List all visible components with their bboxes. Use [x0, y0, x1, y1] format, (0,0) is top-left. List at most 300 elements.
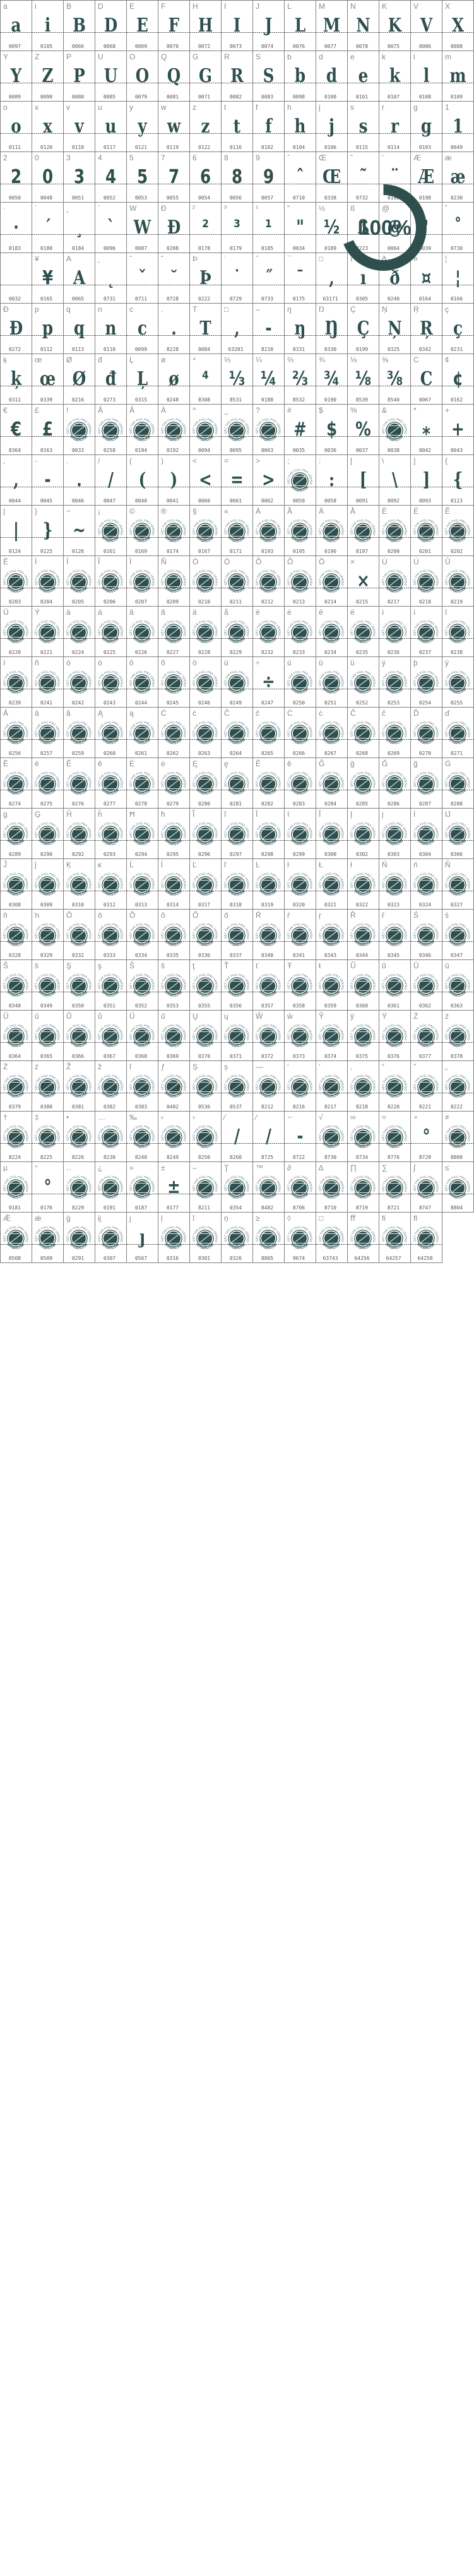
- badge 8734: [347, 1111, 379, 1162]
- badge 0264: Ĉ: [224, 709, 230, 718]
- badge 0362: [410, 959, 442, 1011]
- glyph 0168: [379, 151, 411, 203]
- badge 0293: ĥ: [98, 810, 102, 819]
- glyph 0037: 0037: [356, 448, 368, 453]
- badge 0337: [221, 909, 253, 960]
- glyph 0190: ¾: [324, 368, 340, 390]
- badge 0167: [189, 505, 222, 556]
- glyph 0273: đ: [105, 368, 116, 390]
- glyph 0188: 0188: [261, 397, 273, 403]
- glyph 0103: 0103: [419, 145, 431, 150]
- glyph 0097: 0097: [9, 44, 21, 49]
- glyph 0050: 2: [3, 153, 8, 162]
- badge 0207: Ï: [129, 557, 131, 566]
- badge 0352: 0352: [135, 1003, 147, 1009]
- glyph 0728: ˘: [170, 267, 178, 289]
- glyph 0040: (: [129, 456, 132, 465]
- badge 0312: ĸ: [98, 860, 102, 869]
- glyph 0080: P: [66, 52, 71, 61]
- badge 0372: 0372: [261, 1054, 273, 1059]
- glyph 0036: $: [319, 406, 323, 415]
- badge 0268: [347, 707, 379, 758]
- badge 0207: 0207: [135, 599, 147, 605]
- glyph 0231: 0231: [451, 347, 463, 352]
- glyph 0342: Ŗ: [420, 318, 433, 340]
- badge 0346: 0346: [419, 953, 431, 958]
- badge 0313: Ĺ: [129, 860, 134, 869]
- badge 0380: 0380: [40, 1104, 52, 1110]
- badge 0207: [126, 555, 158, 607]
- glyph 0342: Ŗ: [413, 305, 419, 314]
- glyph 0092: [379, 454, 411, 506]
- badge 0266: [284, 707, 316, 758]
- badge 0274: Ē: [3, 759, 8, 768]
- glyph 0098: b: [295, 65, 305, 87]
- glyph 0042: 0042: [419, 448, 431, 453]
- glyph 0062: [252, 454, 285, 506]
- glyph 0049: 1: [453, 116, 463, 138]
- glyph 0272: 0272: [9, 347, 21, 352]
- badge 0359: ŧ: [319, 961, 321, 970]
- glyph 0331: ŋ: [295, 318, 305, 340]
- glyph 0081: Q: [167, 65, 181, 87]
- glyph 0089: Y: [11, 65, 21, 87]
- glyph 0050: 2: [11, 166, 21, 188]
- badge 0298: [252, 808, 285, 859]
- badge 0059: 0059: [293, 498, 305, 504]
- glyph 0035: 0035: [293, 448, 305, 453]
- glyph 0231: [442, 303, 474, 354]
- glyph 0091: [: [360, 469, 367, 491]
- badge 0266: Ċ: [287, 709, 293, 718]
- badge 64256: ﬀ: [350, 1214, 355, 1223]
- badge 0299: 0299: [293, 852, 305, 857]
- glyph 0083: S: [263, 65, 274, 87]
- badge 0228: [189, 606, 222, 657]
- badge 0221: [32, 606, 64, 657]
- badge 0213: [284, 555, 316, 607]
- badge 8776: ≈: [382, 1113, 386, 1122]
- badge 0262: [158, 707, 190, 758]
- badge 0201: É: [413, 507, 418, 516]
- badge 0508: Ǽ: [3, 1214, 11, 1223]
- glyph 8210: 8210: [261, 347, 273, 352]
- badge 8710: [316, 1161, 348, 1213]
- badge 8216: [284, 1060, 316, 1112]
- badge 0246: [189, 656, 222, 708]
- glyph 0216: [63, 353, 95, 405]
- badge 0361: [379, 959, 411, 1011]
- glyph 0248: 0248: [167, 397, 179, 403]
- glyph 0065: 0065: [72, 296, 84, 302]
- badge 0349: ŝ: [35, 961, 39, 970]
- glyph 0071: 0071: [198, 94, 210, 100]
- badge 0282: [252, 757, 285, 809]
- badge 0260: [95, 707, 127, 758]
- glyph 0215: ×: [350, 557, 355, 566]
- glyph 0051: 3: [74, 166, 85, 188]
- glyph 0222: Þ: [199, 267, 211, 289]
- badge 0367: ů: [98, 1012, 102, 1021]
- glyph 0185: 0185: [261, 246, 273, 251]
- badge 0195: [284, 505, 316, 556]
- badge 8805: [252, 1212, 285, 1263]
- badge 0327: Ň: [445, 860, 451, 869]
- badge 0362: Ū: [413, 961, 419, 970]
- glyph 0032: 0032: [9, 296, 21, 302]
- badge 0210: [189, 555, 222, 607]
- badge 0169: ©: [129, 507, 135, 516]
- glyph 8728: ∘: [413, 1113, 418, 1122]
- badge 0275: [32, 757, 64, 809]
- badge 0319: 0319: [261, 902, 273, 908]
- glyph 0216: Ø: [66, 355, 72, 364]
- glyph 0035: #: [293, 418, 307, 441]
- glyph 0123: {: [445, 456, 447, 465]
- badge 63743: [316, 1212, 348, 1263]
- glyph 0223: ß: [350, 204, 355, 213]
- glyph 0090: 0090: [40, 94, 52, 100]
- glyph 0164: [410, 252, 442, 304]
- glyph 8364: 8364: [9, 448, 21, 453]
- glyph 0043: +: [451, 418, 465, 441]
- badge 0271: 0271: [451, 751, 463, 756]
- badge 0250: ú: [287, 658, 292, 667]
- glyph 0111: o: [11, 116, 21, 138]
- badge 0297: ĩ: [224, 810, 226, 819]
- badge 0284: Ĝ: [319, 759, 324, 768]
- badge 0536: Ș: [193, 1062, 198, 1071]
- badge 8706: ∂: [287, 1163, 291, 1172]
- badge 0204: 0204: [40, 599, 52, 605]
- badge 0376: 0376: [388, 1054, 400, 1059]
- glyph 0305: ı: [350, 254, 352, 263]
- badge 0234: 0234: [324, 650, 336, 655]
- glyph 0096: `: [98, 204, 100, 213]
- badge 0253: ý: [382, 658, 386, 667]
- glyph 0086: V: [413, 2, 418, 11]
- badge 0194: Â: [129, 406, 134, 415]
- glyph 0325: Ņ: [382, 305, 388, 314]
- badge 0197: 0197: [356, 549, 368, 554]
- badge 0224: 0224: [72, 650, 84, 655]
- badge 0214: 0214: [324, 599, 336, 605]
- badge 0340: 0340: [261, 953, 273, 958]
- glyph 0198: 0198: [419, 195, 431, 201]
- glyph 8364: €: [3, 406, 8, 415]
- badge 0306: 0306: [451, 852, 463, 857]
- glyph 0040: 0040: [135, 498, 147, 504]
- badge 8220: [379, 1060, 411, 1112]
- glyph 0114: [379, 101, 411, 152]
- glyph 0199: [347, 303, 379, 354]
- badge 0213: 0213: [293, 599, 305, 605]
- glyph 0072: [189, 0, 222, 51]
- glyph 0177: ±: [167, 1176, 181, 1198]
- badge 0278: 0278: [135, 801, 147, 807]
- badge 0275: 0275: [40, 801, 52, 807]
- glyph 0183: ·: [13, 217, 19, 239]
- badge 0372: Ŵ: [256, 1012, 263, 1021]
- glyph 0077: M: [319, 2, 325, 11]
- glyph 0567: ȷ: [129, 1214, 131, 1223]
- glyph 8539: ⅛: [350, 355, 357, 364]
- glyph 0036: [316, 404, 348, 455]
- badge 8250: 8250: [198, 1154, 210, 1160]
- badge 8229: 8229: [72, 1205, 84, 1211]
- glyph 0090: Z: [42, 65, 53, 87]
- badge 0288: 0288: [451, 801, 463, 807]
- glyph 0731: [95, 252, 127, 304]
- badge 0402: ƒ: [161, 1062, 165, 1071]
- glyph 0083: [252, 50, 285, 102]
- badge 64258: ﬂ: [413, 1214, 417, 1223]
- glyph 0710: 0710: [293, 195, 305, 201]
- badge 0366: 0366: [72, 1054, 84, 1059]
- glyph 0044: [0, 454, 32, 506]
- glyph 0036: $: [326, 418, 337, 441]
- badge 0038: [379, 404, 411, 455]
- glyph 8539: ⅛: [355, 368, 371, 390]
- glyph 0188: ¼: [261, 368, 276, 390]
- badge 0321: [316, 858, 348, 910]
- glyph 0117: u: [105, 116, 116, 138]
- glyph 0065: A: [66, 254, 71, 263]
- glyph 0076: L: [287, 2, 292, 11]
- glyph 0222: 0222: [198, 296, 210, 302]
- badge 8218: ‚: [350, 1062, 352, 1071]
- badge 0374: 0374: [324, 1054, 336, 1059]
- glyph 0330: 0330: [324, 347, 336, 352]
- glyph 0113: [63, 303, 95, 354]
- badge 0181: µ: [3, 1163, 8, 1172]
- badge 0327: [442, 858, 474, 910]
- badge 0348: [0, 959, 32, 1011]
- glyph 8531: ⅓: [224, 355, 230, 364]
- badge 0233: 0233: [293, 650, 305, 655]
- badge 0368: [126, 1010, 158, 1061]
- badge 0369: 0369: [167, 1054, 179, 1059]
- glyph 0062: >: [256, 456, 260, 465]
- glyph 0339: [32, 353, 64, 405]
- glyph 0084: 0084: [198, 347, 210, 352]
- glyph 0165: ¥: [35, 254, 39, 263]
- glyph 0338: [316, 151, 348, 203]
- badge 0202: [442, 505, 474, 556]
- glyph 0107: 0107: [388, 94, 400, 100]
- glyph 0247: [252, 656, 285, 708]
- badge 0350: Ş: [66, 961, 71, 970]
- badge 0306: [442, 808, 474, 859]
- badge 0332: 0332: [72, 953, 84, 958]
- badge 0202: Ê: [445, 507, 450, 516]
- badge 0337: 0337: [230, 953, 242, 958]
- badge 0368: Ű: [129, 1012, 135, 1021]
- glyph 0175: ¯: [296, 267, 304, 289]
- badge 0509: ǽ: [35, 1214, 42, 1223]
- badge 0377: [410, 1010, 442, 1061]
- badge 0191: 0191: [104, 1205, 116, 1211]
- badge 0214: Ö: [319, 557, 324, 566]
- badge 0291: [63, 1212, 95, 1263]
- glyph 0047: /: [98, 456, 100, 465]
- badge 0302: Į: [350, 810, 352, 819]
- glyph 0177: [158, 1161, 190, 1213]
- badge 0258: 0258: [104, 448, 116, 453]
- badge 0344: [347, 909, 379, 960]
- glyph 8728: 8728: [419, 1154, 431, 1160]
- badge 8776: [379, 1111, 411, 1162]
- glyph 0331: [284, 303, 316, 354]
- glyph 0733: ˝: [256, 254, 258, 263]
- glyph 8722: -: [297, 1125, 304, 1148]
- glyph 0076: 0076: [293, 44, 305, 49]
- glyph 0079: O: [129, 52, 135, 61]
- badge 0363: ū: [445, 961, 449, 970]
- glyph 0072: H: [198, 15, 213, 37]
- badge 0357: [252, 959, 285, 1011]
- glyph 0107: k: [382, 52, 386, 61]
- glyph 0057: 9: [256, 153, 260, 162]
- badge 8730: [316, 1111, 348, 1162]
- badge 0277: 0277: [104, 801, 116, 807]
- badge 0308: [0, 858, 32, 910]
- donut progress overlay: [343, 184, 427, 271]
- badge 0341: 0341: [293, 953, 305, 958]
- glyph 0110: n: [105, 318, 116, 340]
- glyph 0710: [284, 151, 316, 203]
- badge 0347: 0347: [451, 953, 463, 958]
- glyph 0728: [158, 252, 190, 304]
- badge 0210: 0210: [198, 599, 210, 605]
- badge 8225: ‡: [35, 1113, 39, 1122]
- badge 0258: [95, 404, 127, 455]
- glyph 8722: 8722: [293, 1154, 305, 1160]
- glyph 0056: 8: [224, 153, 228, 162]
- glyph 0092: \: [392, 469, 398, 491]
- glyph 0081: 0081: [167, 94, 179, 100]
- badge 0269: [379, 707, 411, 758]
- glyph 0115: 0115: [356, 145, 368, 150]
- glyph 0045: -: [44, 469, 51, 491]
- glyph 0077: [316, 0, 348, 51]
- badge 0310: Ķ: [66, 860, 71, 869]
- glyph 0119: [158, 101, 190, 152]
- badge 0366: [63, 1010, 95, 1061]
- glyph 0047: 0047: [104, 498, 116, 504]
- badge 0284: [316, 757, 348, 809]
- glyph 0126: 0126: [72, 549, 84, 554]
- badge 0063: 0063: [261, 448, 273, 453]
- glyph 0042: *: [422, 424, 430, 446]
- glyph 0711: 0711: [135, 296, 147, 302]
- glyph 0180: ´: [44, 217, 52, 239]
- badge 0225: 0225: [104, 650, 116, 655]
- glyph 0189: 0189: [324, 246, 336, 251]
- glyph 0710: ˆ: [296, 166, 304, 188]
- glyph 0084: T: [199, 318, 211, 340]
- glyph 0052: 0052: [104, 195, 116, 201]
- glyph 0315: 0315: [135, 397, 147, 403]
- badge 0379: 0379: [9, 1104, 21, 1110]
- badge 0299: ī: [287, 810, 289, 819]
- glyph 0047: /: [108, 469, 114, 491]
- badge 0220: [0, 606, 32, 657]
- badge 8710: 8710: [324, 1205, 336, 1211]
- glyph 0088: X: [452, 15, 464, 37]
- badge 0300: Ĭ: [319, 810, 321, 819]
- badge 0283: [284, 757, 316, 809]
- glyph 0083: S: [256, 52, 261, 61]
- glyph 0090: Z: [35, 52, 39, 61]
- badge 8747: [410, 1161, 442, 1213]
- glyph 0086: [410, 0, 442, 51]
- badge 0171: «: [224, 507, 228, 516]
- glyph 0177: 0177: [167, 1205, 179, 1211]
- glyph 0118: 0118: [72, 145, 84, 150]
- badge 64257: 64257: [386, 1255, 401, 1261]
- glyph 0097: [0, 0, 32, 51]
- glyph 0342: [410, 303, 442, 354]
- glyph 0124: [0, 505, 32, 556]
- glyph 0061: =: [230, 469, 244, 491]
- badge 8211: –: [193, 1163, 197, 1172]
- glyph 0089: Y: [3, 52, 8, 61]
- glyph 0248: ø: [161, 355, 165, 364]
- glyph 0121: y: [138, 116, 147, 138]
- badge 0246: 0246: [198, 700, 210, 706]
- badge 8230: …: [98, 1113, 105, 1122]
- badge 0227: ã: [161, 608, 165, 617]
- badge 0366: Ů: [66, 1012, 72, 1021]
- glyph 0168: 0168: [388, 195, 400, 201]
- glyph 0043: [442, 404, 474, 455]
- badge 0232: è: [256, 608, 260, 617]
- glyph 0247: ÷: [262, 671, 275, 693]
- glyph 0064: [379, 202, 411, 253]
- glyph 0041: ): [170, 469, 177, 491]
- glyph 0054: 6: [193, 153, 197, 162]
- glyph 0183: 0183: [9, 246, 21, 251]
- badge 0327: 0327: [451, 902, 463, 908]
- badge 8482: ™: [256, 1163, 263, 1172]
- glyph 0101: 0101: [356, 94, 368, 100]
- glyph 0184: ¸: [75, 217, 83, 239]
- badge 0278: [126, 757, 158, 809]
- badge 0351: ş: [98, 961, 102, 970]
- badge 0292: Ĥ: [66, 810, 72, 819]
- glyph 0112: p: [35, 305, 39, 314]
- badge 0288: Ġ: [445, 759, 451, 768]
- badge 0033: !: [66, 406, 68, 415]
- glyph 0567: ȷ: [139, 1226, 145, 1249]
- glyph 0184: 0184: [72, 246, 84, 251]
- glyph 63171: 63171: [323, 296, 338, 302]
- badge 0200: 0200: [388, 549, 400, 554]
- badge 0276: 0276: [72, 801, 84, 807]
- badge 0361: 0361: [388, 1003, 400, 1009]
- badge 0265: ĉ: [256, 709, 259, 718]
- glyph 0069: 0069: [135, 44, 147, 49]
- glyph 8364: €: [11, 418, 21, 441]
- glyph 0311: [0, 353, 32, 405]
- glyph 0070: F: [169, 15, 179, 37]
- badge 0203: [0, 555, 32, 607]
- glyph 0087: 0087: [135, 246, 147, 251]
- badge 0219: 0219: [451, 599, 463, 605]
- badge 0254: þ: [413, 658, 418, 667]
- glyph 0052: 4: [105, 166, 116, 188]
